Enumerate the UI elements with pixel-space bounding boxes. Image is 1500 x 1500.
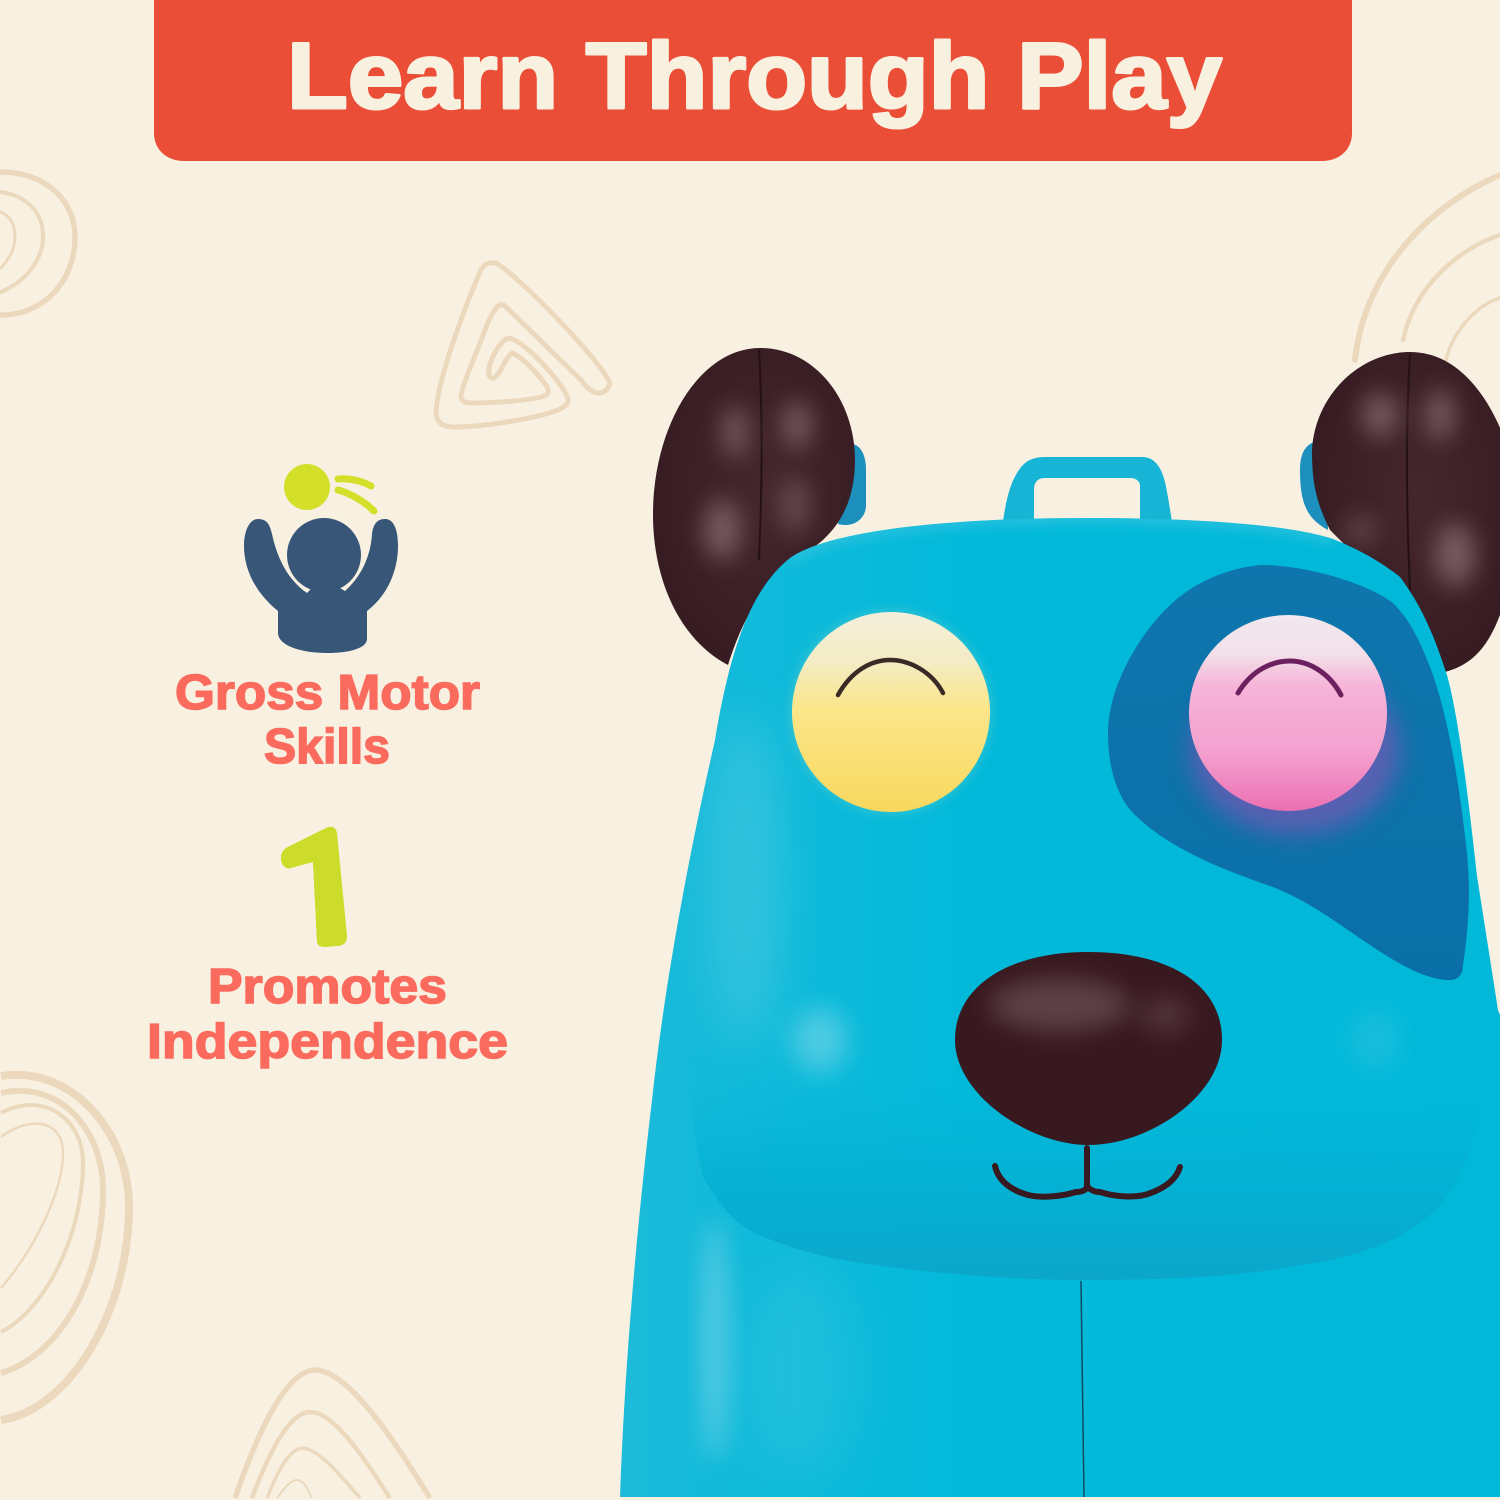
carry handle: [1002, 457, 1173, 528]
pink eye: [1189, 615, 1387, 811]
decorative contour: triangle spiral: [436, 263, 610, 427]
label: gross motor skills: Gross Motor: [175, 666, 480, 720]
mouth: [995, 1148, 1180, 1197]
toy bear: [620, 348, 1500, 1497]
decorative contour: bottom triangles: [235, 1370, 430, 1498]
numeral: 1: 1: [270, 794, 360, 984]
yellow eye: [792, 612, 990, 812]
left ear: [653, 348, 855, 665]
face plate: [696, 1134, 1450, 1280]
decorative contour: bottom left rings: [1, 1075, 129, 1420]
body: [620, 518, 1500, 1497]
title banner: [154, 0, 1352, 161]
label: promotes independence: Promotes: [208, 960, 447, 1014]
seam: [1081, 1281, 1084, 1497]
label: promotes independence: Independence: [147, 1015, 508, 1069]
decorative contour: top left rings: [1, 172, 75, 315]
label: promotes independence: [147, 960, 508, 1069]
eye glow: [1190, 665, 1400, 835]
eye patch: [1108, 565, 1469, 980]
label: gross motor skills: [175, 666, 480, 774]
nose: [955, 952, 1222, 1145]
decorative contour: top right rings: [1355, 175, 1500, 365]
body shading and highlights: [688, 518, 1500, 1480]
label: gross motor skills: Skills: [264, 720, 390, 774]
icon: child catching ball: [244, 464, 398, 653]
right ear: [1312, 352, 1500, 672]
title: Learn Through Play: [287, 23, 1222, 128]
ear tabs: [838, 440, 1328, 530]
